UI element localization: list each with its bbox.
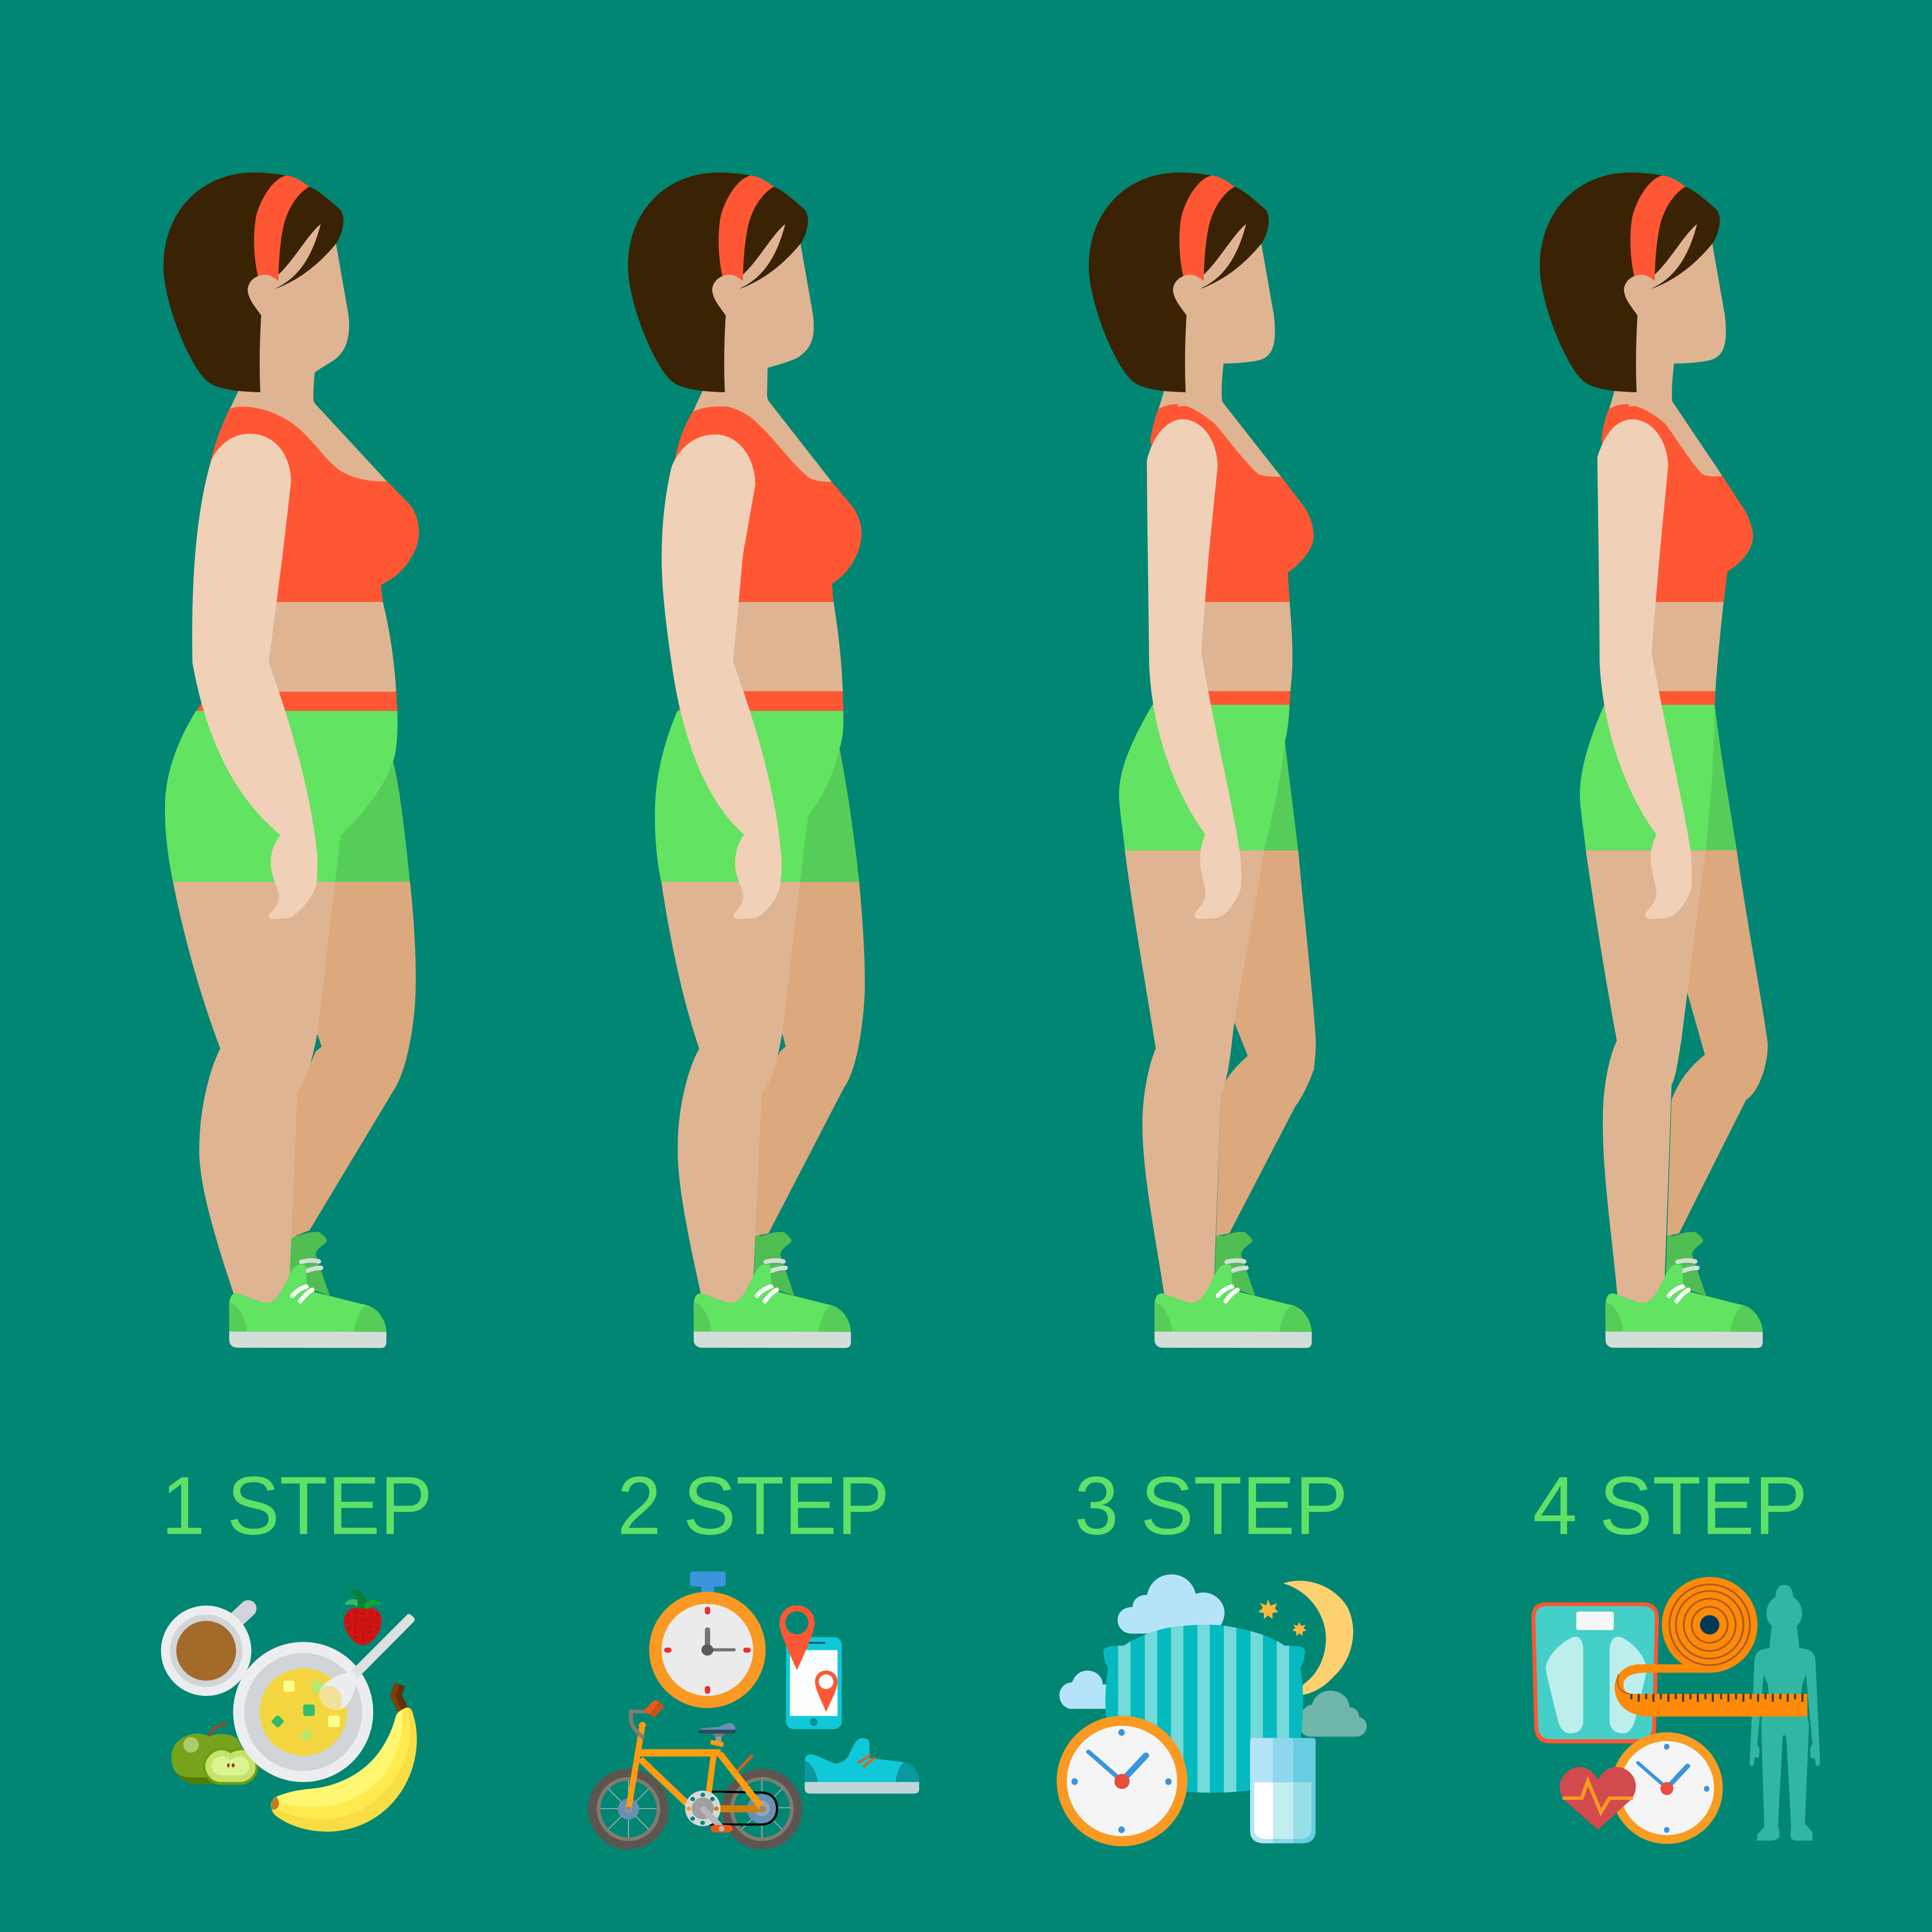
head 1 (163, 172, 349, 406)
icon: stopwatch (649, 1571, 765, 1708)
top (1150, 404, 1314, 602)
heading: 1 STEP: 1 STEP (162, 1460, 432, 1552)
shorts (165, 711, 398, 882)
neck and chest skin (692, 367, 832, 493)
arm (1597, 419, 1692, 919)
icon: banana (271, 1683, 417, 1832)
near leg (1125, 850, 1264, 1306)
waistband (196, 692, 397, 712)
shoe 4 tongue and laces (1665, 1232, 1706, 1296)
shoe 1 tongue and laces (289, 1232, 330, 1296)
shoe 4 (1605, 1265, 1763, 1348)
waistband (1604, 691, 1715, 706)
icon: left cloud (1060, 1671, 1109, 1709)
shoe 2 tongue and laces (754, 1232, 794, 1296)
shorts (1119, 705, 1289, 850)
icon: small star (1292, 1622, 1307, 1636)
shorts shaded (335, 762, 410, 882)
icon: clock (1611, 1732, 1723, 1844)
near leg (1586, 850, 1706, 1306)
icon: clock (1057, 1716, 1187, 1846)
arm (192, 434, 318, 919)
far leg (1216, 850, 1316, 1236)
far leg (291, 882, 416, 1240)
top (211, 407, 419, 602)
shorts (1580, 705, 1715, 850)
arm (1147, 419, 1242, 919)
icon: running shoe (804, 1738, 919, 1794)
shoe 3 (1155, 1265, 1312, 1348)
top (1601, 404, 1753, 602)
heading: 4 STEP: 4 STEP (1533, 1460, 1808, 1552)
shorts shaded (800, 748, 859, 882)
figure 2 (628, 172, 865, 1348)
figure 1 (163, 172, 419, 1348)
waistband (1152, 691, 1291, 706)
icon: moon (1283, 1581, 1353, 1695)
icon: bathroom scale (1531, 1602, 1659, 1743)
shoe 3 tongue and laces (1214, 1232, 1255, 1296)
icon: glass of milk (1250, 1738, 1316, 1843)
icon: spoon (319, 1614, 415, 1710)
icon: soup bowl (233, 1642, 373, 1782)
head 3 (1089, 172, 1275, 406)
neck and chest skin (229, 370, 387, 493)
icon: apples (172, 1724, 258, 1785)
top (675, 406, 862, 602)
head 2 (628, 172, 814, 406)
figure 3 (1089, 172, 1316, 1348)
near leg (173, 882, 335, 1306)
icon: phone with location pins (779, 1605, 842, 1729)
far leg (1667, 850, 1768, 1236)
icon group: sleep (1057, 1575, 1367, 1846)
waist skin (714, 601, 843, 691)
heading: 3 STEP: 3 STEP (1075, 1460, 1348, 1552)
head 4 (1540, 172, 1726, 406)
waist skin (1183, 601, 1293, 691)
infographic canvas (161, 172, 1820, 1849)
icon: right cloud (1299, 1690, 1367, 1737)
icon: top cloud (1117, 1575, 1225, 1634)
figure 4 (1540, 172, 1768, 1348)
icon group: exercise (588, 1571, 919, 1849)
icon: heart with pulse (1560, 1767, 1636, 1830)
waist skin (1639, 601, 1724, 691)
waistband (677, 691, 843, 712)
shorts shaded (1264, 741, 1298, 850)
icon group: tracking (1531, 1577, 1820, 1844)
shorts (655, 711, 844, 882)
far leg (755, 882, 865, 1236)
icon: bicycle (588, 1701, 802, 1849)
shoe 2 (694, 1265, 851, 1348)
neck and chest skin (1158, 364, 1281, 493)
icon: coffee cup (161, 1605, 251, 1696)
icon: body silhouette (1750, 1585, 1820, 1840)
shorts shaded (1706, 706, 1737, 850)
icon: strawberry (344, 1590, 382, 1645)
icon group: food (161, 1590, 417, 1832)
icon: large star (1258, 1600, 1278, 1619)
near leg (661, 882, 800, 1306)
heading: 2 STEP: 2 STEP (617, 1460, 889, 1552)
neck and chest skin (1609, 364, 1722, 493)
arm (662, 434, 782, 919)
waist skin (247, 601, 396, 692)
icon: measuring tape (1615, 1577, 1808, 1717)
shoe 1 (229, 1265, 386, 1348)
icon: striped pillow (1103, 1620, 1305, 1798)
